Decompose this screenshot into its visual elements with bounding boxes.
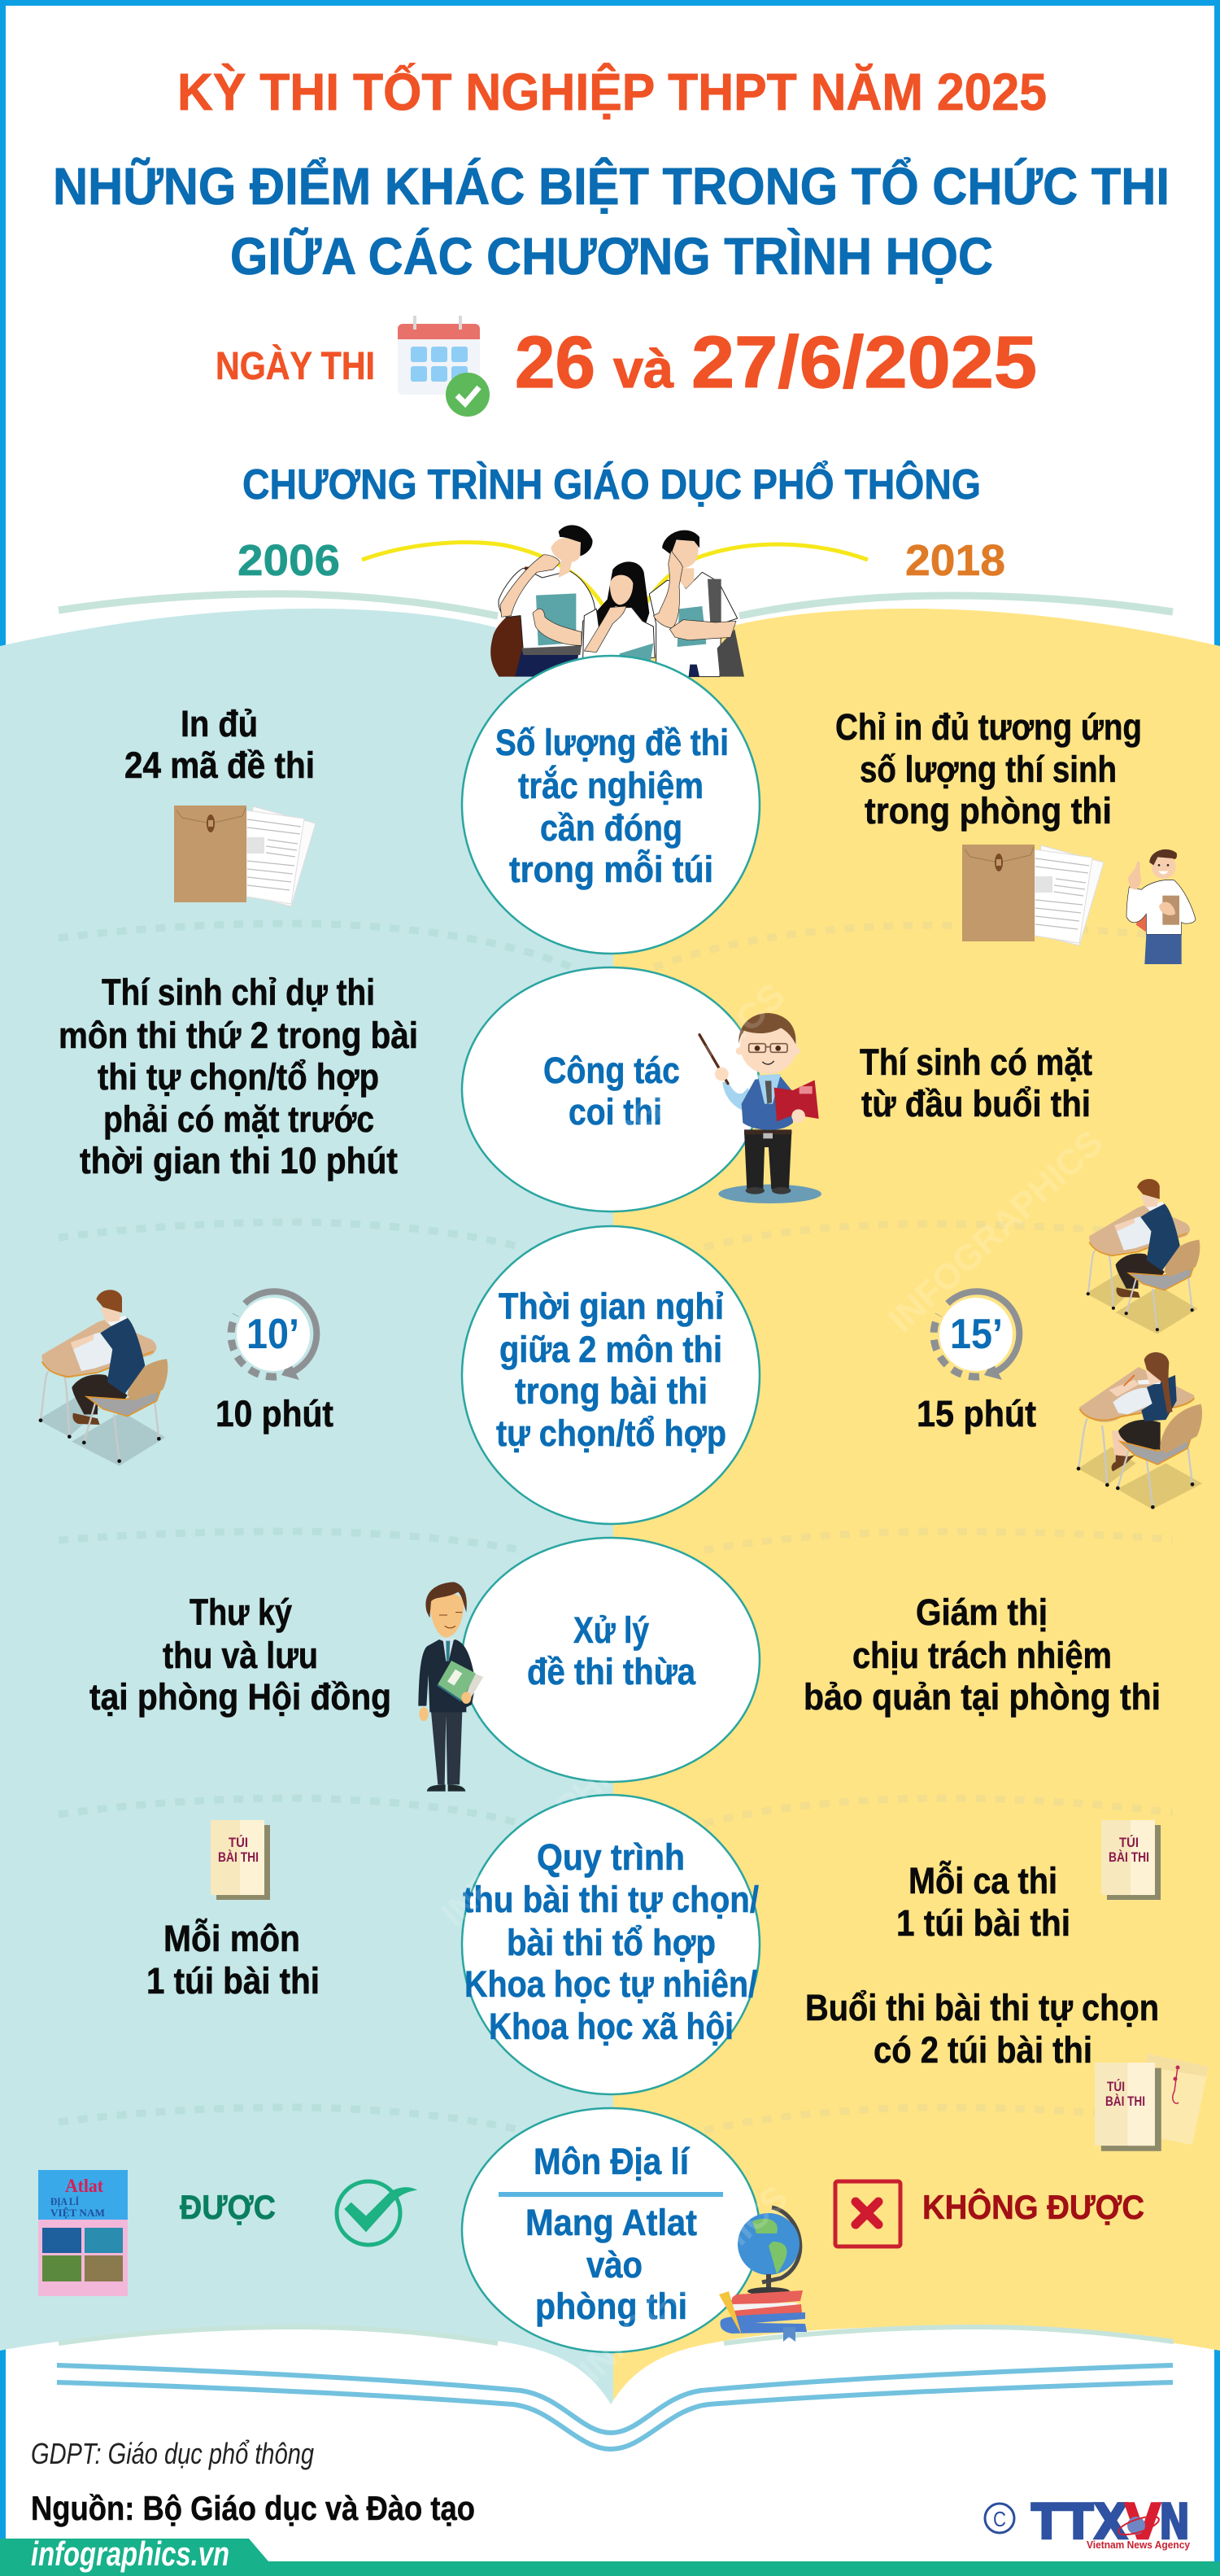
title: exam name: KỲ THI TỐT NGHIỆP THPT NĂM 2025 [177, 62, 1047, 121]
icon: two exam bags: BÀI THI [1105, 2094, 1145, 2109]
icon: envelope with papers left [174, 806, 316, 906]
text: 2006 print 24 codes: 24 mã đề thi [124, 744, 315, 786]
text: 2006 one bag per subject: Mỗi môn [163, 1918, 300, 1959]
row 3: break time [38, 1179, 1202, 1524]
icon: exam bag right: BÀI THI [1109, 1849, 1149, 1865]
bubble: number of test papers: Số lượng đề thi [495, 722, 729, 763]
text: 2006 one bag per subject: 1 túi bài thi [146, 1960, 320, 2002]
icon: atlas book cover: ĐỊA LÍ [50, 2195, 79, 2207]
bubble: collection process: bài thi tổ hợp [507, 1922, 716, 1963]
logo: TTXVN: Vietnam News Agency [1087, 2539, 1191, 2551]
bubble: handling surplus papers: Xử lý [573, 1609, 649, 1651]
label: not allowed: KHÔNG ĐƯỢC [922, 2187, 1144, 2226]
text: 2006 print 24 codes [124, 703, 315, 786]
bubble: bringing atlas into exam room [462, 2108, 760, 2352]
icon: exam bag left: TÚI [229, 1835, 248, 1850]
year 2006: 2006 [237, 536, 340, 585]
logo: TTXVN: N [1159, 2494, 1190, 2551]
label: exam day: NGÀY THI [216, 344, 375, 388]
text: 2018 print per candidates: số lượng thí sinh [860, 749, 1117, 790]
bubble: invigilation work: Công tác [543, 1050, 680, 1091]
exam date [515, 322, 1037, 404]
text: 2018 print per candidates: trong phòng thi [865, 790, 1112, 832]
exam date: 27/6/2025 [691, 322, 1037, 404]
bubble: collection process [462, 1795, 760, 2094]
bubble: handling surplus papers: đề thi thừa [527, 1651, 696, 1692]
icon: 10 minute clock: 10’ [246, 1311, 299, 1358]
icon: exam bag left: BÀI THI [218, 1849, 259, 1865]
icon: exam bag right: TÚI [1119, 1835, 1139, 1850]
heading: differences in organisation: GIỮA CÁC CHƯƠNG TRÌNH HỌC [230, 227, 993, 286]
text: 2018 invigilator: Giám thị [916, 1591, 1048, 1633]
bubble: break between subjects [462, 1226, 760, 1524]
text: 2006 invigilation rule: phải có mặt trước [103, 1098, 374, 1140]
watermarks: INFOGRAPHICS [557, 976, 793, 1198]
text: 2018 one bag per session: 1 túi bài thi [896, 1902, 1070, 1944]
bubble: bringing atlas into exam room: Mang Atlat [525, 2202, 697, 2243]
exam date: và [613, 338, 673, 399]
text: 2006 secretary: tại phòng Hội đồng [89, 1676, 391, 1718]
source: Nguồn: Bộ Giáo dục và Đào tạo [31, 2489, 475, 2527]
row 5: collecting bags [146, 1795, 1209, 2151]
text: 2006 invigilation rule: thi tự chọn/tổ hợp [98, 1056, 379, 1098]
bubble: break between subjects: trong bài thi [515, 1370, 708, 1412]
row 4: surplus papers [89, 1538, 1161, 1792]
illustration: girl at desk right [1077, 1352, 1202, 1509]
watermarks: INFOGRAPHICS [572, 2177, 795, 2390]
text: 2018 present from start: Thí sinh có mặt [860, 1041, 1092, 1083]
bubble: collection process: thu bài thi tự chọn/ [463, 1879, 759, 1920]
footer bar: infographics.vn [31, 2535, 229, 2573]
watermarks: INFOGRAPHICS [434, 1727, 651, 1934]
text: 2018 one bag per session: có 2 túi bài thi [874, 2029, 1092, 2071]
text: 2018 invigilator: bảo quản tại phòng thi [804, 1676, 1161, 1718]
bottom book lines [57, 2365, 1173, 2449]
illustration: boy at desk left [38, 1290, 168, 1466]
icon: atlas book cover [38, 2170, 128, 2296]
bubble: number of test papers: trong mỗi túi [509, 849, 713, 890]
icon: green check [337, 2181, 417, 2245]
label: allowed: ĐƯỢC [180, 2188, 276, 2226]
bubble: bringing atlas into exam room: phòng thi [535, 2286, 687, 2327]
bubble: handling surplus papers [462, 1538, 760, 1782]
text: 2006 print 24 codes: In đủ [181, 703, 258, 744]
row 1: number of test papers per bag [124, 656, 1196, 964]
illustration: boy at desk right [1086, 1179, 1200, 1334]
bubble: collection process: Khoa học xã hội [489, 2006, 734, 2047]
logo: TTXVN [985, 2494, 1191, 2551]
text: 2018 print per candidates: Chỉ in đủ tương ứng [835, 706, 1142, 748]
text: 2006 one bag per subject [146, 1918, 320, 2002]
icon: two exam bags [1095, 2054, 1209, 2151]
text: 2018 one bag per session [805, 1860, 1159, 2071]
bubble: break between subjects: giữa 2 môn thi [499, 1329, 722, 1370]
year 2018: 2018 [905, 536, 1005, 585]
row 6: geography atlas [38, 2108, 1144, 2352]
bubble: number of test papers: cần đóng [540, 807, 682, 849]
bottom book top edge [59, 2327, 1174, 2343]
text: 2006 secretary: Thư ký [190, 1591, 292, 1633]
bubble: collection process: Quy trình [537, 1836, 685, 1878]
illustration: man with green book [418, 1582, 483, 1792]
text: 2018 one bag per session: Buổi thi bài thi tự chọn [805, 1987, 1159, 2028]
icon: student pointing up [1126, 849, 1196, 964]
panel: left column 2006 background [0, 609, 613, 2404]
bubble: break between subjects: tự chọn/tổ hợp [496, 1412, 726, 1454]
icon: 15 minute clock [934, 1291, 1019, 1380]
row 2: invigilation [59, 967, 1092, 1212]
logo: TTXVN: TTX [1031, 2494, 1128, 2551]
icon: two exam bags: TÚI [1107, 2079, 1125, 2094]
text: 2018 invigilator: chịu trách nhiệm [852, 1635, 1112, 1676]
text: 2018 present from start [860, 1041, 1092, 1124]
heading: differences in organisation: NHỮNG ĐIỂM KHÁC BIỆT TRONG TỔ CHỨC THI [53, 156, 1170, 216]
bubble: collection process: Khoa học tự nhiên/ [464, 1963, 757, 2005]
heading: general education programme: CHƯƠNG TRÌNH GIÁO DỤC PHỔ THÔNG [242, 461, 981, 509]
illustration: teacher with pointer and book [699, 1013, 821, 1203]
bubble: invigilation work: coi thi [569, 1091, 662, 1133]
watermarks: INFOGRAPHICS [881, 1123, 1110, 1340]
heading: differences in organisation [53, 156, 1170, 286]
text: 2018 print per candidates [835, 706, 1142, 832]
icon: envelope with papers right [962, 845, 1104, 945]
icon: atlas book cover: Atlat [65, 2176, 103, 2196]
text: 2006 secretary [89, 1591, 391, 1718]
text: 2018 present from start: từ đầu buổi thi [861, 1083, 1091, 1124]
bubble: number of test papers [462, 656, 760, 954]
text: 2006 secretary: thu và lưu [163, 1635, 318, 1676]
icon: calendar with check [398, 316, 490, 417]
text: 2018 one bag per session: Mỗi ca thi [908, 1860, 1057, 1901]
exam date: 26 [515, 322, 595, 404]
watermarks [434, 976, 1110, 2390]
footer bar [0, 2535, 1220, 2576]
icon: red cross box [835, 2181, 900, 2246]
text: 2018 invigilator [804, 1591, 1161, 1718]
icon: exam bag left [211, 1820, 270, 1900]
bubble: bringing atlas into exam room: Môn Địa lí [534, 2141, 690, 2182]
bubble: invigilation work [462, 967, 760, 1212]
panel: right column 2018 background [611, 609, 1220, 2404]
bubble: break between subjects: Thời gian nghỉ [499, 1286, 724, 1327]
icon: 10 minute clock [231, 1291, 316, 1380]
bubble: number of test papers: trắc nghiệm [518, 765, 704, 806]
text: 15 minutes: 15 phút [917, 1393, 1036, 1434]
bubble: bringing atlas into exam room: vào [586, 2244, 643, 2286]
text: 2006 invigilation rule: môn thi thứ 2 trong bài [59, 1015, 418, 1056]
note: abbreviation: GDPT: Giáo dục phổ thông [31, 2437, 314, 2470]
logo: TTXVN: V [1125, 2494, 1161, 2551]
icon: 15 minute clock: 15’ [950, 1311, 1003, 1358]
illustration: three students [490, 525, 744, 677]
exam date row [216, 316, 1037, 417]
icon: atlas book cover: VIỆT NAM [50, 2207, 105, 2219]
icon: exam bag right [1101, 1820, 1161, 1900]
icon: globe on books [719, 2207, 807, 2342]
text: 2006 invigilation rule [59, 971, 418, 1181]
text: 10 minutes: 10 phút [216, 1393, 333, 1434]
text: 2006 invigilation rule: Thí sinh chỉ dự thi [102, 971, 375, 1013]
logo: TTXVN: C [993, 2507, 1006, 2531]
text: 2006 invigilation rule: thời gian thi 10 phút [80, 1140, 398, 1181]
